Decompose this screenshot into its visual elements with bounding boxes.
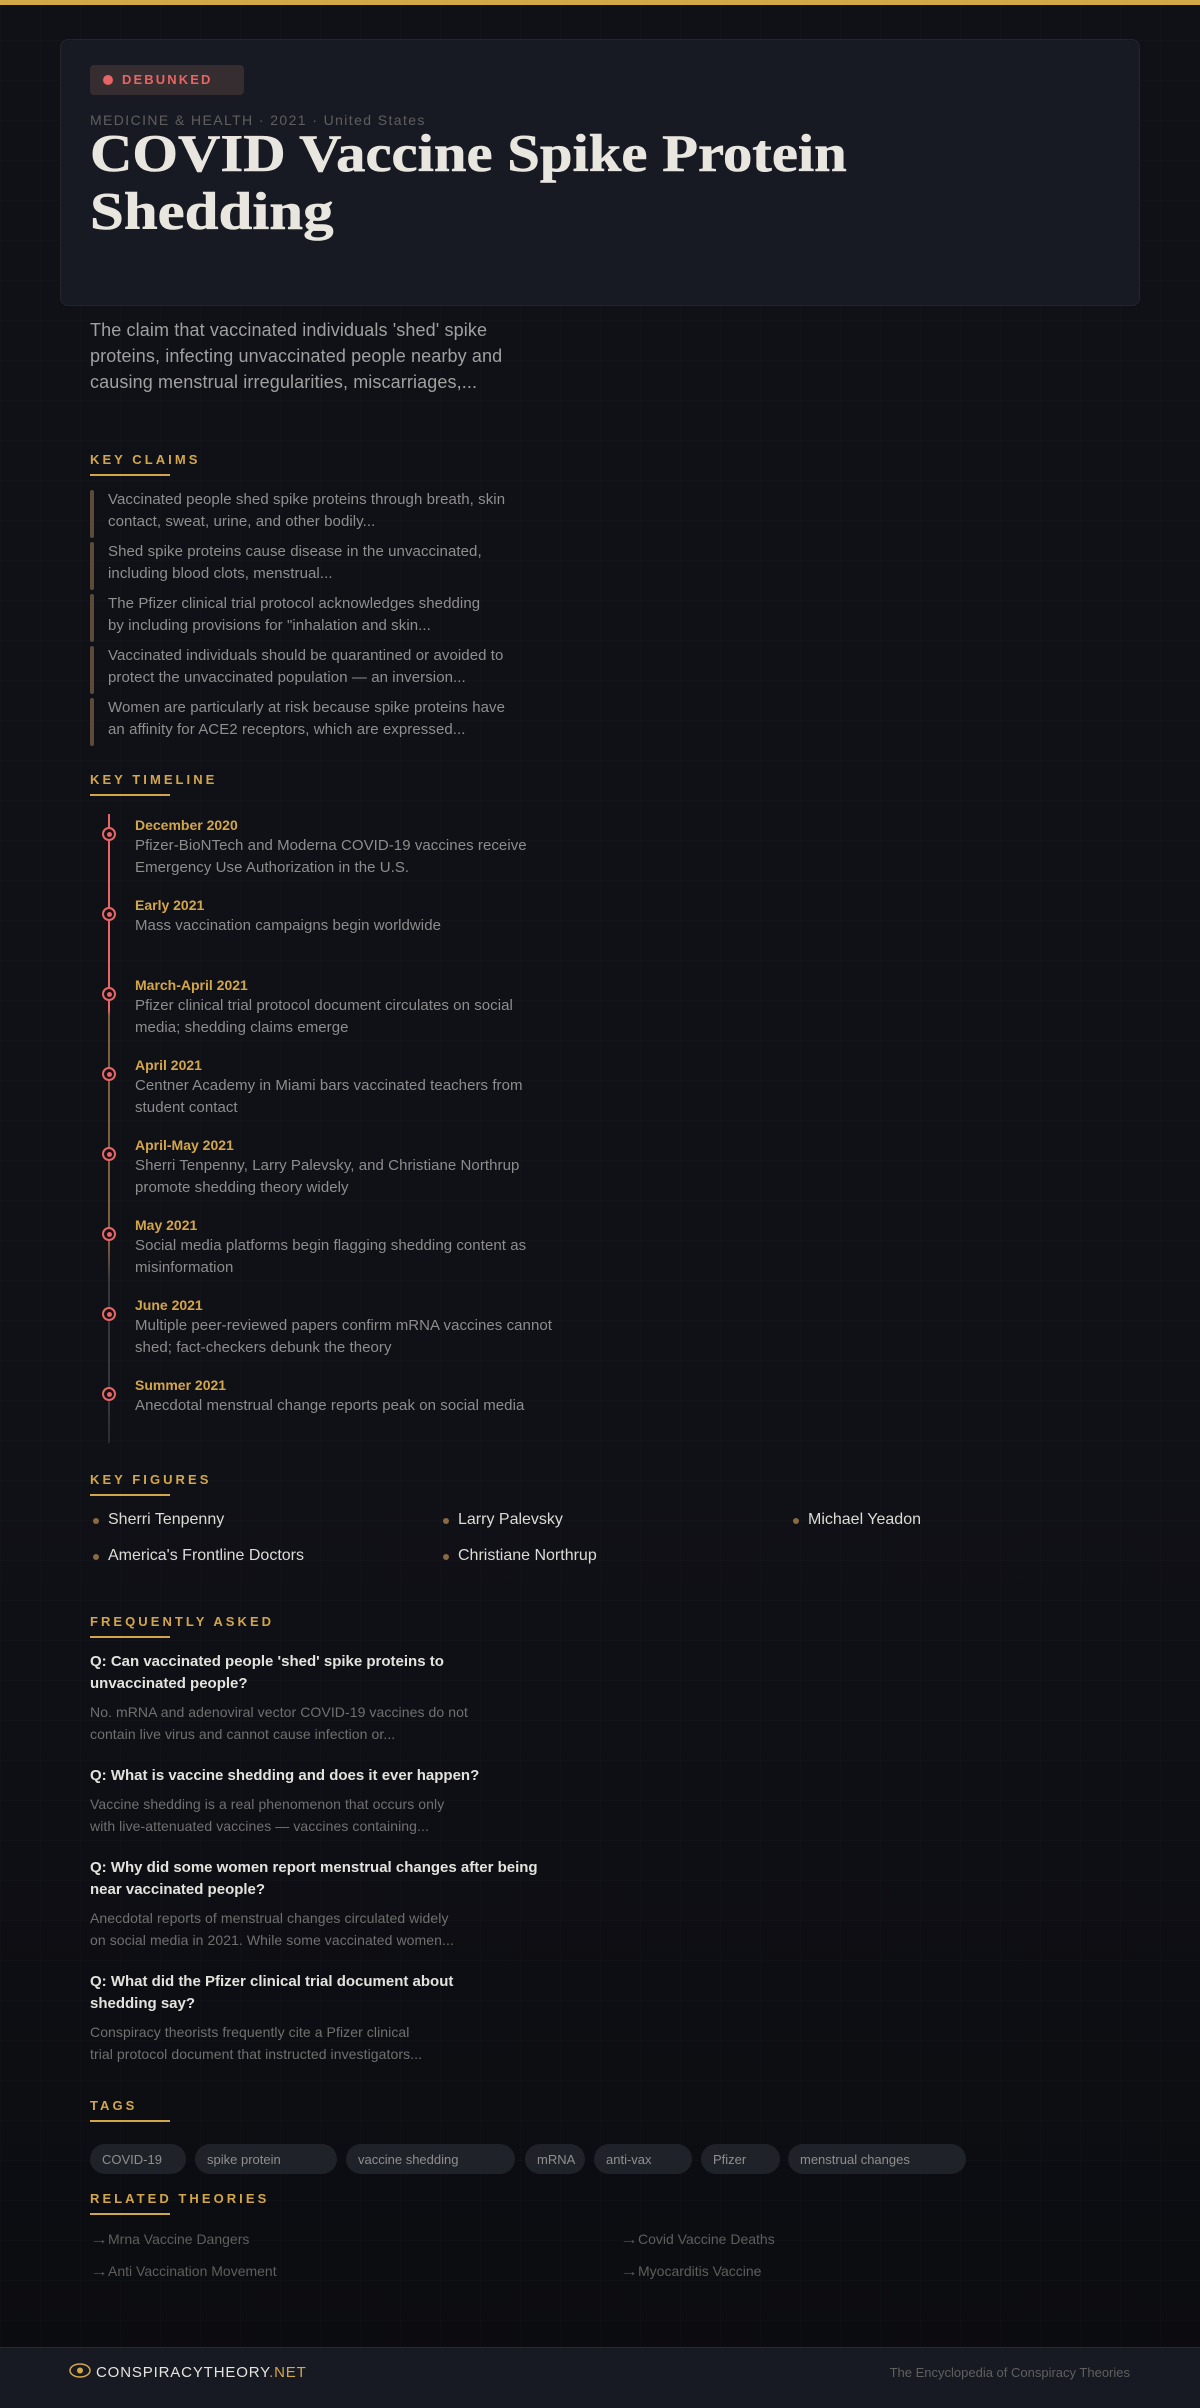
heading: related theories: RELATED THEORIES xyxy=(90,2191,269,2206)
tag: vaccine shedding: vaccine shedding xyxy=(358,2152,458,2167)
panel: timeline: December 2020 xyxy=(135,817,238,833)
FAQ item 1: No. mRNA and adenoviral vector COVID-19 vaccines do not xyxy=(90,1704,468,1720)
event: April-May 2021 xyxy=(102,1137,519,1196)
FAQ item 4: Q: What did the Pfizer clinical trial document about xyxy=(90,1973,453,1990)
link: Myocarditis Vaccine: Myocarditis Vaccine xyxy=(638,2263,761,2279)
tag: mRNA: mRNA xyxy=(537,2152,575,2167)
event: April 2021 xyxy=(102,1057,523,1116)
icon: status dot xyxy=(103,75,113,85)
event: March-April 2021: media; shedding claims emerge xyxy=(135,1019,349,1036)
link: Covid Vaccine Deaths: → xyxy=(620,2231,638,2247)
title xyxy=(90,125,847,241)
tag: mRNA xyxy=(525,2144,585,2174)
figure: Sherri Tenpenny: Sherri Tenpenny xyxy=(108,1511,224,1528)
tag: COVID-19: COVID-19 xyxy=(102,2152,162,2167)
tag: menstrual changes: menstrual changes xyxy=(800,2152,910,2167)
link: Anti Vaccination Movement: Anti Vaccination Movement xyxy=(108,2263,277,2279)
title: COVID Vaccine Spike Protein xyxy=(90,125,847,183)
panel: timeline: April 2021 xyxy=(135,1057,202,1073)
summary text: causing menstrual irregularities, miscarriages,... xyxy=(90,372,477,392)
icon: eye logo xyxy=(69,2363,91,2378)
figure: America's Frontline Doctors: America's Frontline Doctors xyxy=(108,1547,304,1564)
claim 5: an affinity for ACE2 receptors, which are expressed... xyxy=(108,721,466,738)
FAQ item 3: on social media in 2021. While some vaccinated women... xyxy=(90,1932,454,1948)
event: March-April 2021: Pfizer clinical trial protocol document circulates on social xyxy=(135,997,513,1014)
panel: timeline: June 2021 xyxy=(135,1297,203,1313)
badge label: DEBUNKED xyxy=(122,72,212,87)
top accent bar xyxy=(0,0,1200,5)
panel: timeline xyxy=(102,814,552,1443)
footer logo text: CONSPIRACYTHEORY.NET xyxy=(96,2364,307,2381)
panel: related theories xyxy=(90,2231,775,2279)
event: April-May 2021: Sherri Tenpenny, Larry Palevsky, and Christiane Northrup xyxy=(135,1157,519,1174)
FAQ item 3: Q: Why did some women report menstrual changes after being xyxy=(90,1859,538,1876)
heading: frequently asked: FREQUENTLY ASKED xyxy=(90,1614,274,1629)
summary text: The claim that vaccinated individuals 'shed' spike xyxy=(90,320,487,340)
claim 1: contact, sweat, urine, and other bodily... xyxy=(108,513,375,530)
tag: spike protein: spike protein xyxy=(207,2152,281,2167)
panel: timeline: Summer 2021 xyxy=(135,1377,226,1393)
timeline line xyxy=(108,814,110,1443)
FAQ item 2: Q: What is vaccine shedding and does it ever happen? xyxy=(90,1767,479,1784)
tag: anti-vax: anti-vax xyxy=(606,2152,652,2167)
figure: Christiane Northrup: Christiane Northrup xyxy=(458,1547,597,1564)
FAQ item 4: Conspiracy theorists frequently cite a Pfizer clinical xyxy=(90,2024,409,2040)
event: December 2020: Pfizer-BioNTech and Moderna COVID-19 vaccines receive xyxy=(135,837,527,854)
FAQ item 2: with live-attenuated vaccines — vaccines containing... xyxy=(90,1818,429,1834)
FAQ item 2 xyxy=(90,1767,479,1834)
heading: key timeline: KEY TIMELINE xyxy=(90,772,217,787)
event: June 2021 xyxy=(102,1297,552,1356)
FAQ item 4: trial protocol document that instructed investigators... xyxy=(90,2046,422,2062)
event: Summer 2021: Anecdotal menstrual change reports peak on social media xyxy=(135,1397,524,1414)
tag: spike protein xyxy=(195,2144,337,2174)
event: December 2020 xyxy=(102,817,527,876)
figure: Larry Palevsky: Larry Palevsky xyxy=(458,1511,563,1528)
panel: FAQ xyxy=(90,1653,538,2062)
summary text xyxy=(90,320,502,392)
tag: Pfizer: Pfizer xyxy=(713,2152,746,2167)
panel: tags xyxy=(90,2144,966,2174)
panel: timeline: March-April 2021 xyxy=(135,977,248,993)
FAQ item 1: contain live virus and cannot cause infection or... xyxy=(90,1726,395,1742)
event: May 2021: Social media platforms begin flagging shedding content as xyxy=(135,1237,526,1254)
heading: key figures: KEY FIGURES xyxy=(90,1472,211,1487)
FAQ item 3: near vaccinated people? xyxy=(90,1881,265,1898)
panel: timeline: May 2021 xyxy=(135,1217,197,1233)
category meta line: MEDICINE & HEALTH · 2021 · United States xyxy=(90,112,426,128)
event: May 2021: misinformation xyxy=(135,1259,233,1276)
event: December 2020: Emergency Use Authorization in the U.S. xyxy=(135,859,409,876)
tag: anti-vax xyxy=(594,2144,692,2174)
tag: menstrual changes xyxy=(788,2144,966,2174)
event: April 2021: student contact xyxy=(135,1099,238,1116)
claim 2: Shed spike proteins cause disease in the unvaccinated, xyxy=(108,543,482,560)
FAQ item 1: Q: Can vaccinated people 'shed' spike proteins to xyxy=(90,1653,444,1670)
footer xyxy=(0,2347,1200,2408)
claim 1: Vaccinated people shed spike proteins through breath, skin xyxy=(108,491,505,508)
claim 4: Vaccinated individuals should be quarantined or avoided to xyxy=(108,647,503,664)
link: Myocarditis Vaccine: → xyxy=(620,2263,638,2279)
claim 1 xyxy=(90,490,505,538)
claim 3: by including provisions for "inhalation and skin... xyxy=(108,617,431,634)
claim 5 xyxy=(90,698,505,746)
heading: key claims: KEY CLAIMS xyxy=(90,452,200,467)
badge: debunked xyxy=(90,65,244,95)
figure: Michael Yeadon: Michael Yeadon xyxy=(808,1511,921,1528)
claim 2 xyxy=(90,542,482,590)
claim 4 xyxy=(90,646,503,694)
panel: key claims list xyxy=(90,490,505,746)
title: Shedding xyxy=(90,183,334,241)
FAQ item 3 xyxy=(90,1859,538,1948)
tag: vaccine shedding xyxy=(346,2144,515,2174)
claim 3 xyxy=(90,594,480,642)
link: Anti Vaccination Movement: → xyxy=(90,2263,108,2279)
link: Covid Vaccine Deaths: Covid Vaccine Deaths xyxy=(638,2231,775,2247)
heading: tags: TAGS xyxy=(90,2098,137,2113)
FAQ item 1: unvaccinated people? xyxy=(90,1675,248,1692)
panel: timeline: April-May 2021 xyxy=(135,1137,234,1153)
FAQ item 3: Anecdotal reports of menstrual changes circulated widely xyxy=(90,1910,449,1926)
event: April 2021: Centner Academy in Miami bars vaccinated teachers from xyxy=(135,1077,523,1094)
FAQ item 2: Vaccine shedding is a real phenomenon that occurs only xyxy=(90,1796,444,1812)
panel: key figures list xyxy=(93,1511,921,1564)
event: May 2021 xyxy=(102,1217,526,1276)
event: March-April 2021 xyxy=(102,977,513,1036)
claim 3: The Pfizer clinical trial protocol acknowledges shedding xyxy=(108,595,480,612)
event: Early 2021: Mass vaccination campaigns begin worldwide xyxy=(135,917,441,934)
claim 5: Women are particularly at risk because spike proteins have xyxy=(108,699,505,716)
event: Summer 2021 xyxy=(102,1377,524,1414)
footer tagline: The Encyclopedia of Conspiracy Theories xyxy=(890,2365,1130,2380)
tag: COVID-19 xyxy=(90,2144,186,2174)
event: Early 2021 xyxy=(102,897,441,934)
claim 2: including blood clots, menstrual... xyxy=(108,565,333,582)
FAQ item 1 xyxy=(90,1653,468,1742)
claim 4: protect the unvaccinated population — an inversion... xyxy=(108,669,466,686)
summary text: proteins, infecting unvaccinated people nearby and xyxy=(90,346,502,366)
event: April-May 2021: promote shedding theory widely xyxy=(135,1179,349,1196)
FAQ item 4: shedding say? xyxy=(90,1995,195,2012)
link: Mrna Vaccine Dangers: Mrna Vaccine Dangers xyxy=(108,2231,249,2247)
link: Mrna Vaccine Dangers: → xyxy=(90,2231,108,2247)
event: June 2021: shed; fact-checkers debunk the theory xyxy=(135,1339,392,1356)
tag: Pfizer xyxy=(701,2144,780,2174)
event: June 2021: Multiple peer-reviewed papers confirm mRNA vaccines cannot xyxy=(135,1317,552,1334)
panel: hero header xyxy=(60,39,1140,306)
panel: timeline: Early 2021 xyxy=(135,897,204,913)
FAQ item 4 xyxy=(90,1973,454,2062)
